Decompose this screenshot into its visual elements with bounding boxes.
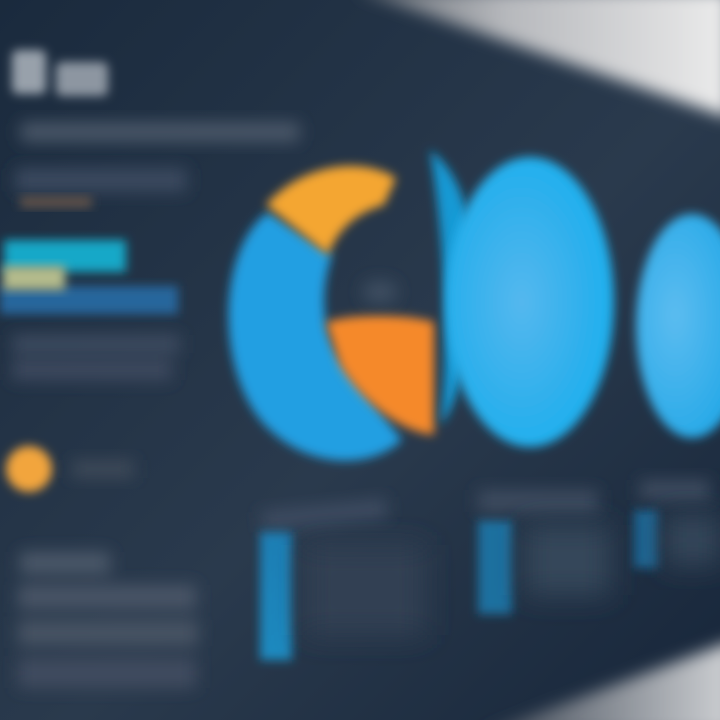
donut chart [228,166,434,461]
left panel text [12,50,300,208]
column 1 text [305,545,425,635]
accent label [20,196,92,208]
subtitle [20,122,300,142]
blue arc [228,212,402,461]
column 3 bar [634,510,658,568]
blue sliver [430,150,474,425]
blue bar [0,286,178,314]
column 3 text [640,480,710,500]
icon: orange circle [6,446,52,492]
column 1 bar [260,532,292,660]
orange circle label [72,460,134,478]
text block left middle [12,335,180,380]
cyan bar [4,240,126,272]
yellow bar [3,266,65,290]
column 2 bar [478,520,512,614]
background corner top right [355,0,720,118]
orange segment [326,316,434,435]
lower labels [260,480,720,660]
column 1 heading [261,498,388,531]
text block bottom left [18,552,198,688]
center mark [362,280,398,304]
large blue oval [446,157,614,447]
right blue oval [636,214,720,438]
yellow segment [266,166,396,255]
heading [12,50,108,96]
text block [15,168,187,192]
background corner bottom right [480,640,720,720]
column 2 text [478,490,598,512]
legend bars [0,240,178,314]
